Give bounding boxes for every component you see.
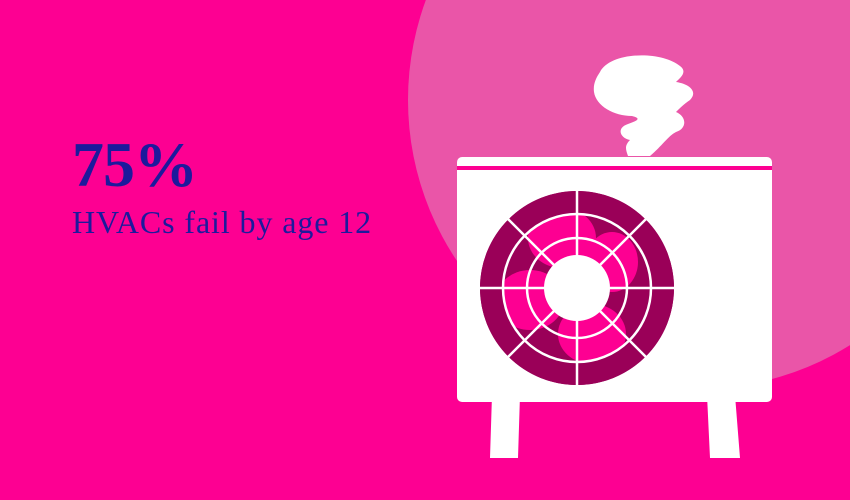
headline stat: 75% [72,129,197,200]
smoke [594,55,693,156]
subtitle: HVACs fail by age 12 [72,204,372,240]
body [457,157,772,402]
legs [490,395,740,458]
fan [480,191,674,385]
